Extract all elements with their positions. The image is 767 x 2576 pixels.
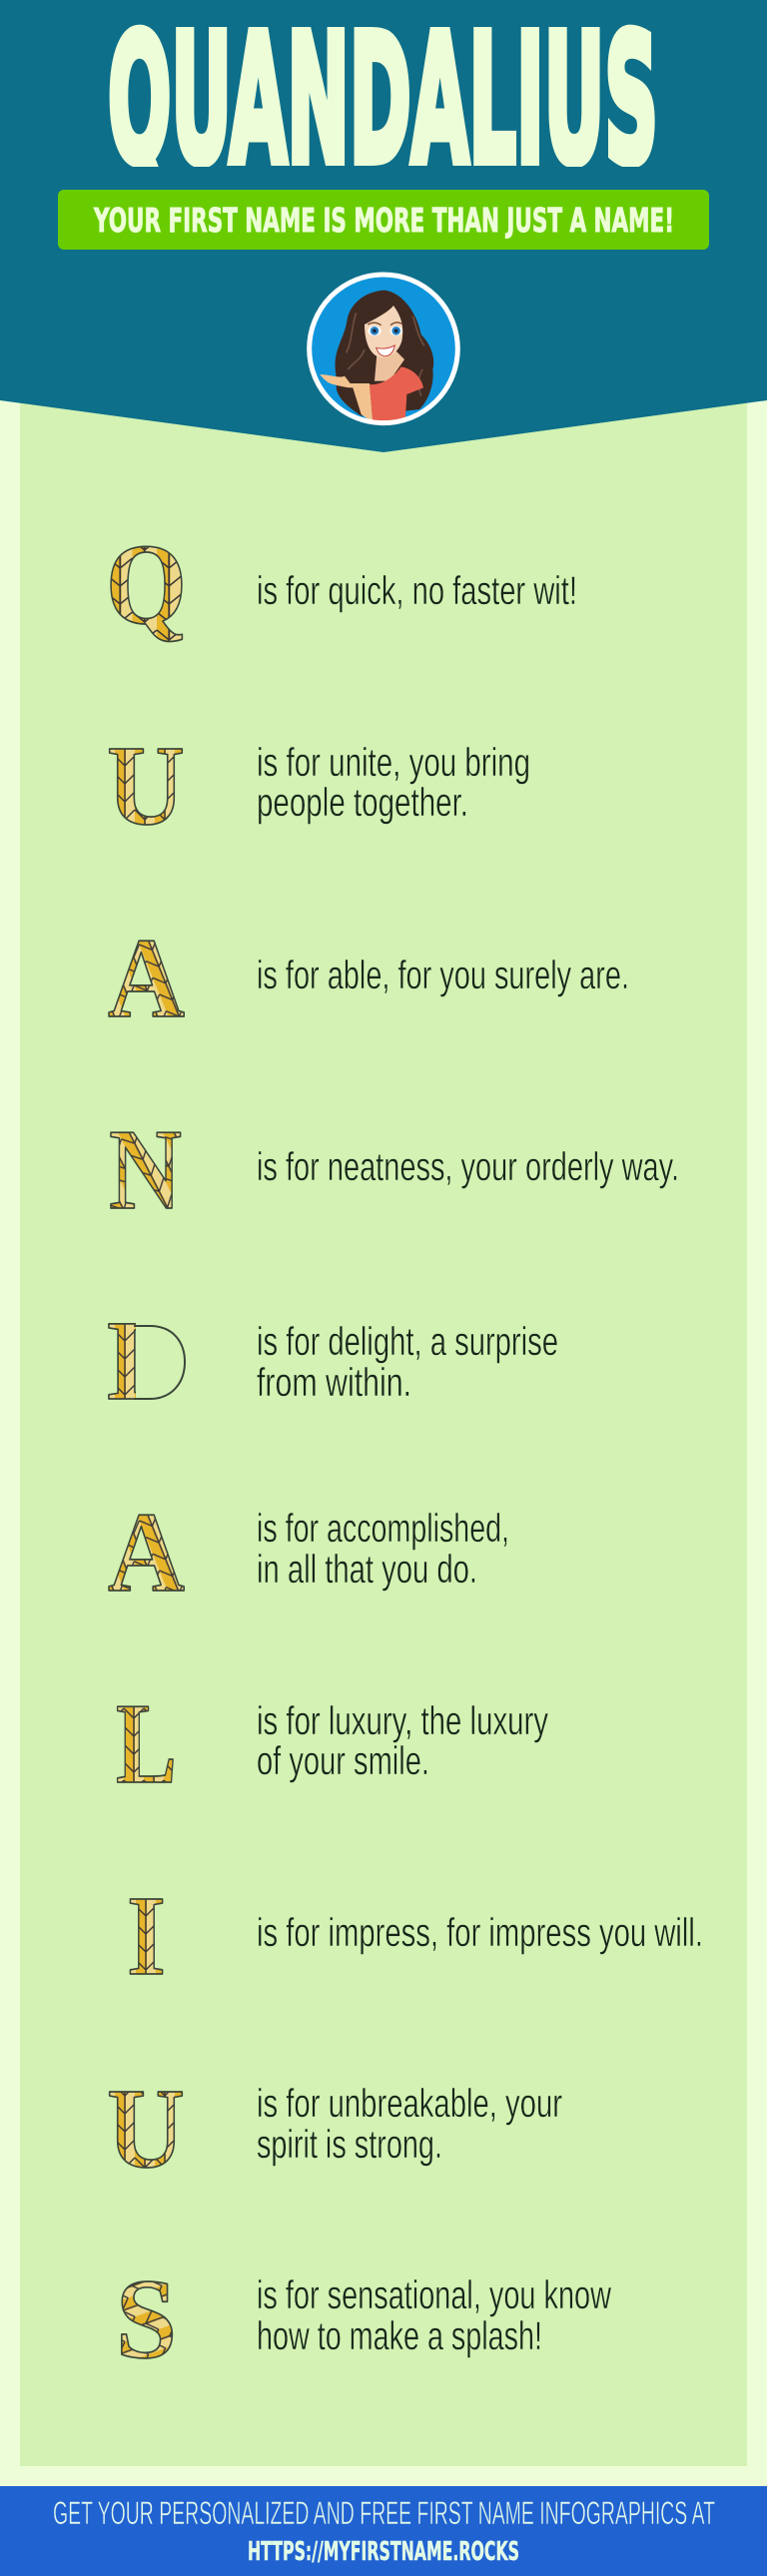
text: U: people together. bbox=[257, 781, 468, 825]
text: U: is for unite, you bring bbox=[257, 741, 530, 785]
text: S bbox=[257, 2273, 611, 2358]
text: L: is for luxury, the luxury bbox=[257, 1699, 548, 1743]
text: L: of your smile. bbox=[257, 1739, 429, 1783]
text: U bbox=[257, 741, 530, 825]
letter A second: A bbox=[108, 1489, 185, 1615]
letter N: N bbox=[109, 1106, 182, 1234]
letter U: U bbox=[107, 722, 185, 849]
text: D bbox=[257, 1320, 558, 1405]
text: U second bbox=[257, 2082, 562, 2167]
text: A: is for able, for you surely are. bbox=[257, 954, 629, 997]
text: L bbox=[257, 1699, 548, 1783]
row: L bbox=[116, 1680, 548, 1808]
text: A second bbox=[257, 1507, 509, 1592]
text: S: how to make a splash! bbox=[257, 2314, 542, 2358]
row: I bbox=[127, 1872, 703, 1999]
row: N bbox=[109, 1106, 679, 1234]
text: A second: is for accomplished, bbox=[257, 1507, 509, 1551]
text: U second: is for unbreakable, your bbox=[257, 2082, 562, 2126]
letter Q: Q bbox=[106, 521, 187, 649]
letter D bbox=[108, 1323, 186, 1400]
row: U second bbox=[107, 2065, 562, 2192]
letter I: I bbox=[127, 1872, 166, 1999]
footer line 2: HTTPS://MYFIRSTNAME.ROCKS bbox=[248, 2537, 519, 2567]
row: U bbox=[107, 722, 530, 849]
row: A bbox=[108, 915, 629, 1041]
letter A: A bbox=[108, 915, 185, 1041]
text: D: is for delight, a surprise bbox=[257, 1320, 558, 1364]
row: S bbox=[116, 2255, 611, 2382]
text: D: from within. bbox=[257, 1361, 411, 1405]
footer band bbox=[0, 2486, 767, 2576]
text: A second: in all that you do. bbox=[257, 1548, 477, 1592]
row: D bbox=[108, 1323, 557, 1400]
panel: letters background bbox=[20, 394, 747, 2466]
subtitle bar bbox=[58, 190, 709, 250]
text: S: is for sensational, you know bbox=[257, 2273, 611, 2317]
text: Q: is for quick, no faster wit! bbox=[257, 569, 577, 613]
text: U second: spirit is strong. bbox=[257, 2123, 442, 2167]
header banner with chevron bbox=[0, 0, 767, 452]
icon: woman avatar in circle bbox=[310, 275, 457, 423]
letter L: L bbox=[116, 1680, 177, 1808]
letter D: D bbox=[107, 1297, 186, 1424]
row: Q bbox=[106, 521, 577, 649]
letter S: S bbox=[116, 2255, 177, 2382]
row: A second bbox=[108, 1489, 509, 1615]
letter U second: U bbox=[107, 2065, 185, 2192]
